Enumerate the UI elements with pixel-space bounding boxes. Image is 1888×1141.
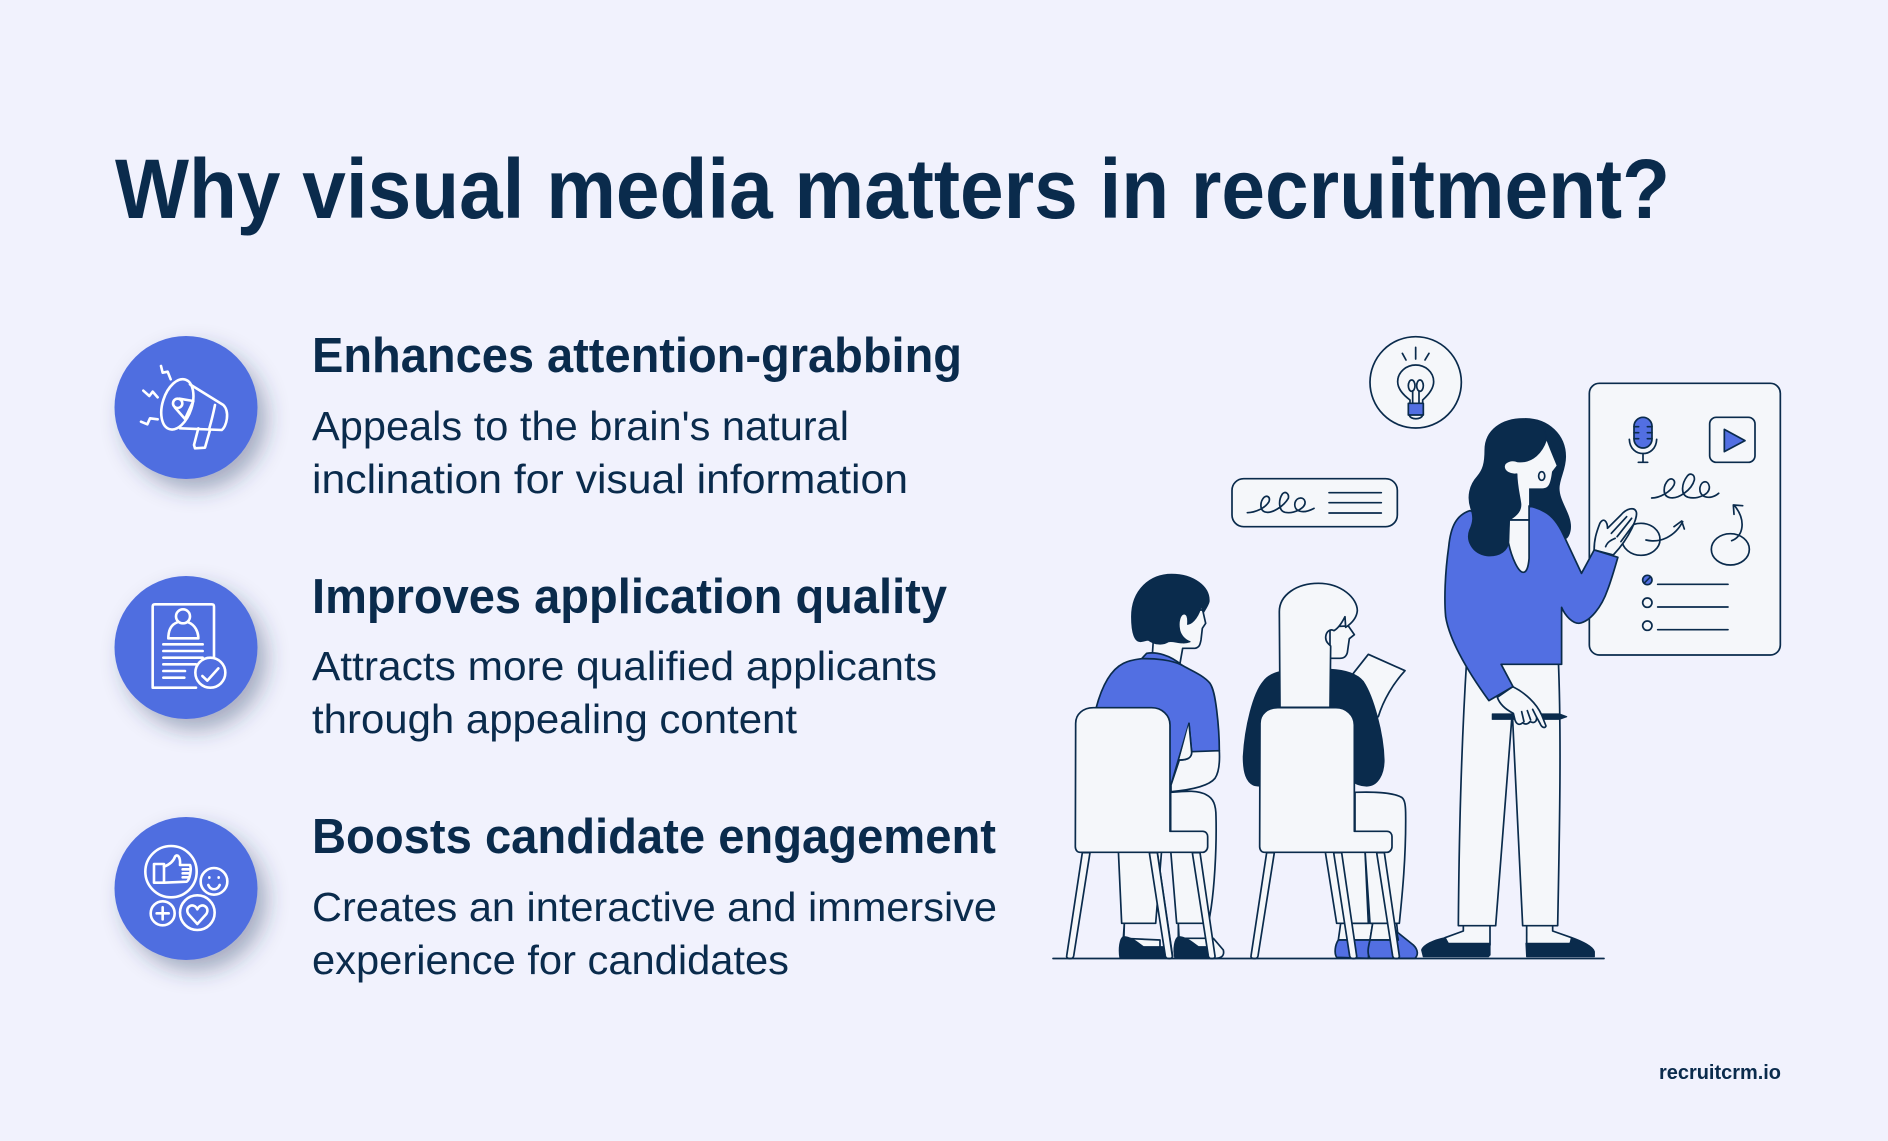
presentation board [1589, 383, 1780, 655]
description: inclination for visual information [312, 456, 908, 502]
footer: website: recruitcrm.io [1659, 1062, 1781, 1084]
chair 1 [1067, 708, 1215, 959]
legs and shoes [1422, 660, 1594, 957]
item: improves application quality [114, 570, 947, 742]
description: Creates an interactive and immersive [312, 884, 997, 930]
description: experience for candidates [312, 937, 789, 983]
speech box with scribble [1232, 479, 1397, 527]
item: enhances attention-grabbing [114, 329, 962, 502]
description: through appealing content [312, 696, 798, 742]
icon: resume with check [114, 576, 258, 719]
description: Appeals to the brain's natural [312, 403, 849, 449]
standing presenter [1422, 419, 1637, 957]
item: boosts candidate engagement [114, 810, 997, 983]
description [312, 884, 997, 983]
title: Why visual media matters in recruitment? [115, 142, 1670, 236]
illustration: presentation scene [1053, 337, 1780, 959]
description [312, 403, 908, 502]
seated man [1096, 574, 1224, 958]
heading: Improves application quality [312, 570, 947, 624]
icon: megaphone [114, 336, 258, 479]
upper body [1445, 419, 1637, 701]
description [312, 643, 937, 742]
icon: reactions [114, 817, 258, 960]
seated woman with paper [1243, 583, 1417, 958]
heading: Enhances attention-grabbing [312, 329, 962, 383]
ground line [1053, 958, 1604, 960]
checklist [1643, 575, 1728, 630]
chair 2 [1251, 708, 1399, 959]
heading: Boosts candidate engagement [312, 810, 996, 864]
description: Attracts more qualified applicants [312, 643, 937, 689]
scribble [1652, 474, 1719, 498]
diagram circles and arrows [1622, 505, 1749, 565]
icon: light bulb bubble [1370, 337, 1461, 428]
icon: microphone [1629, 417, 1657, 462]
icon: play button [1710, 417, 1755, 462]
